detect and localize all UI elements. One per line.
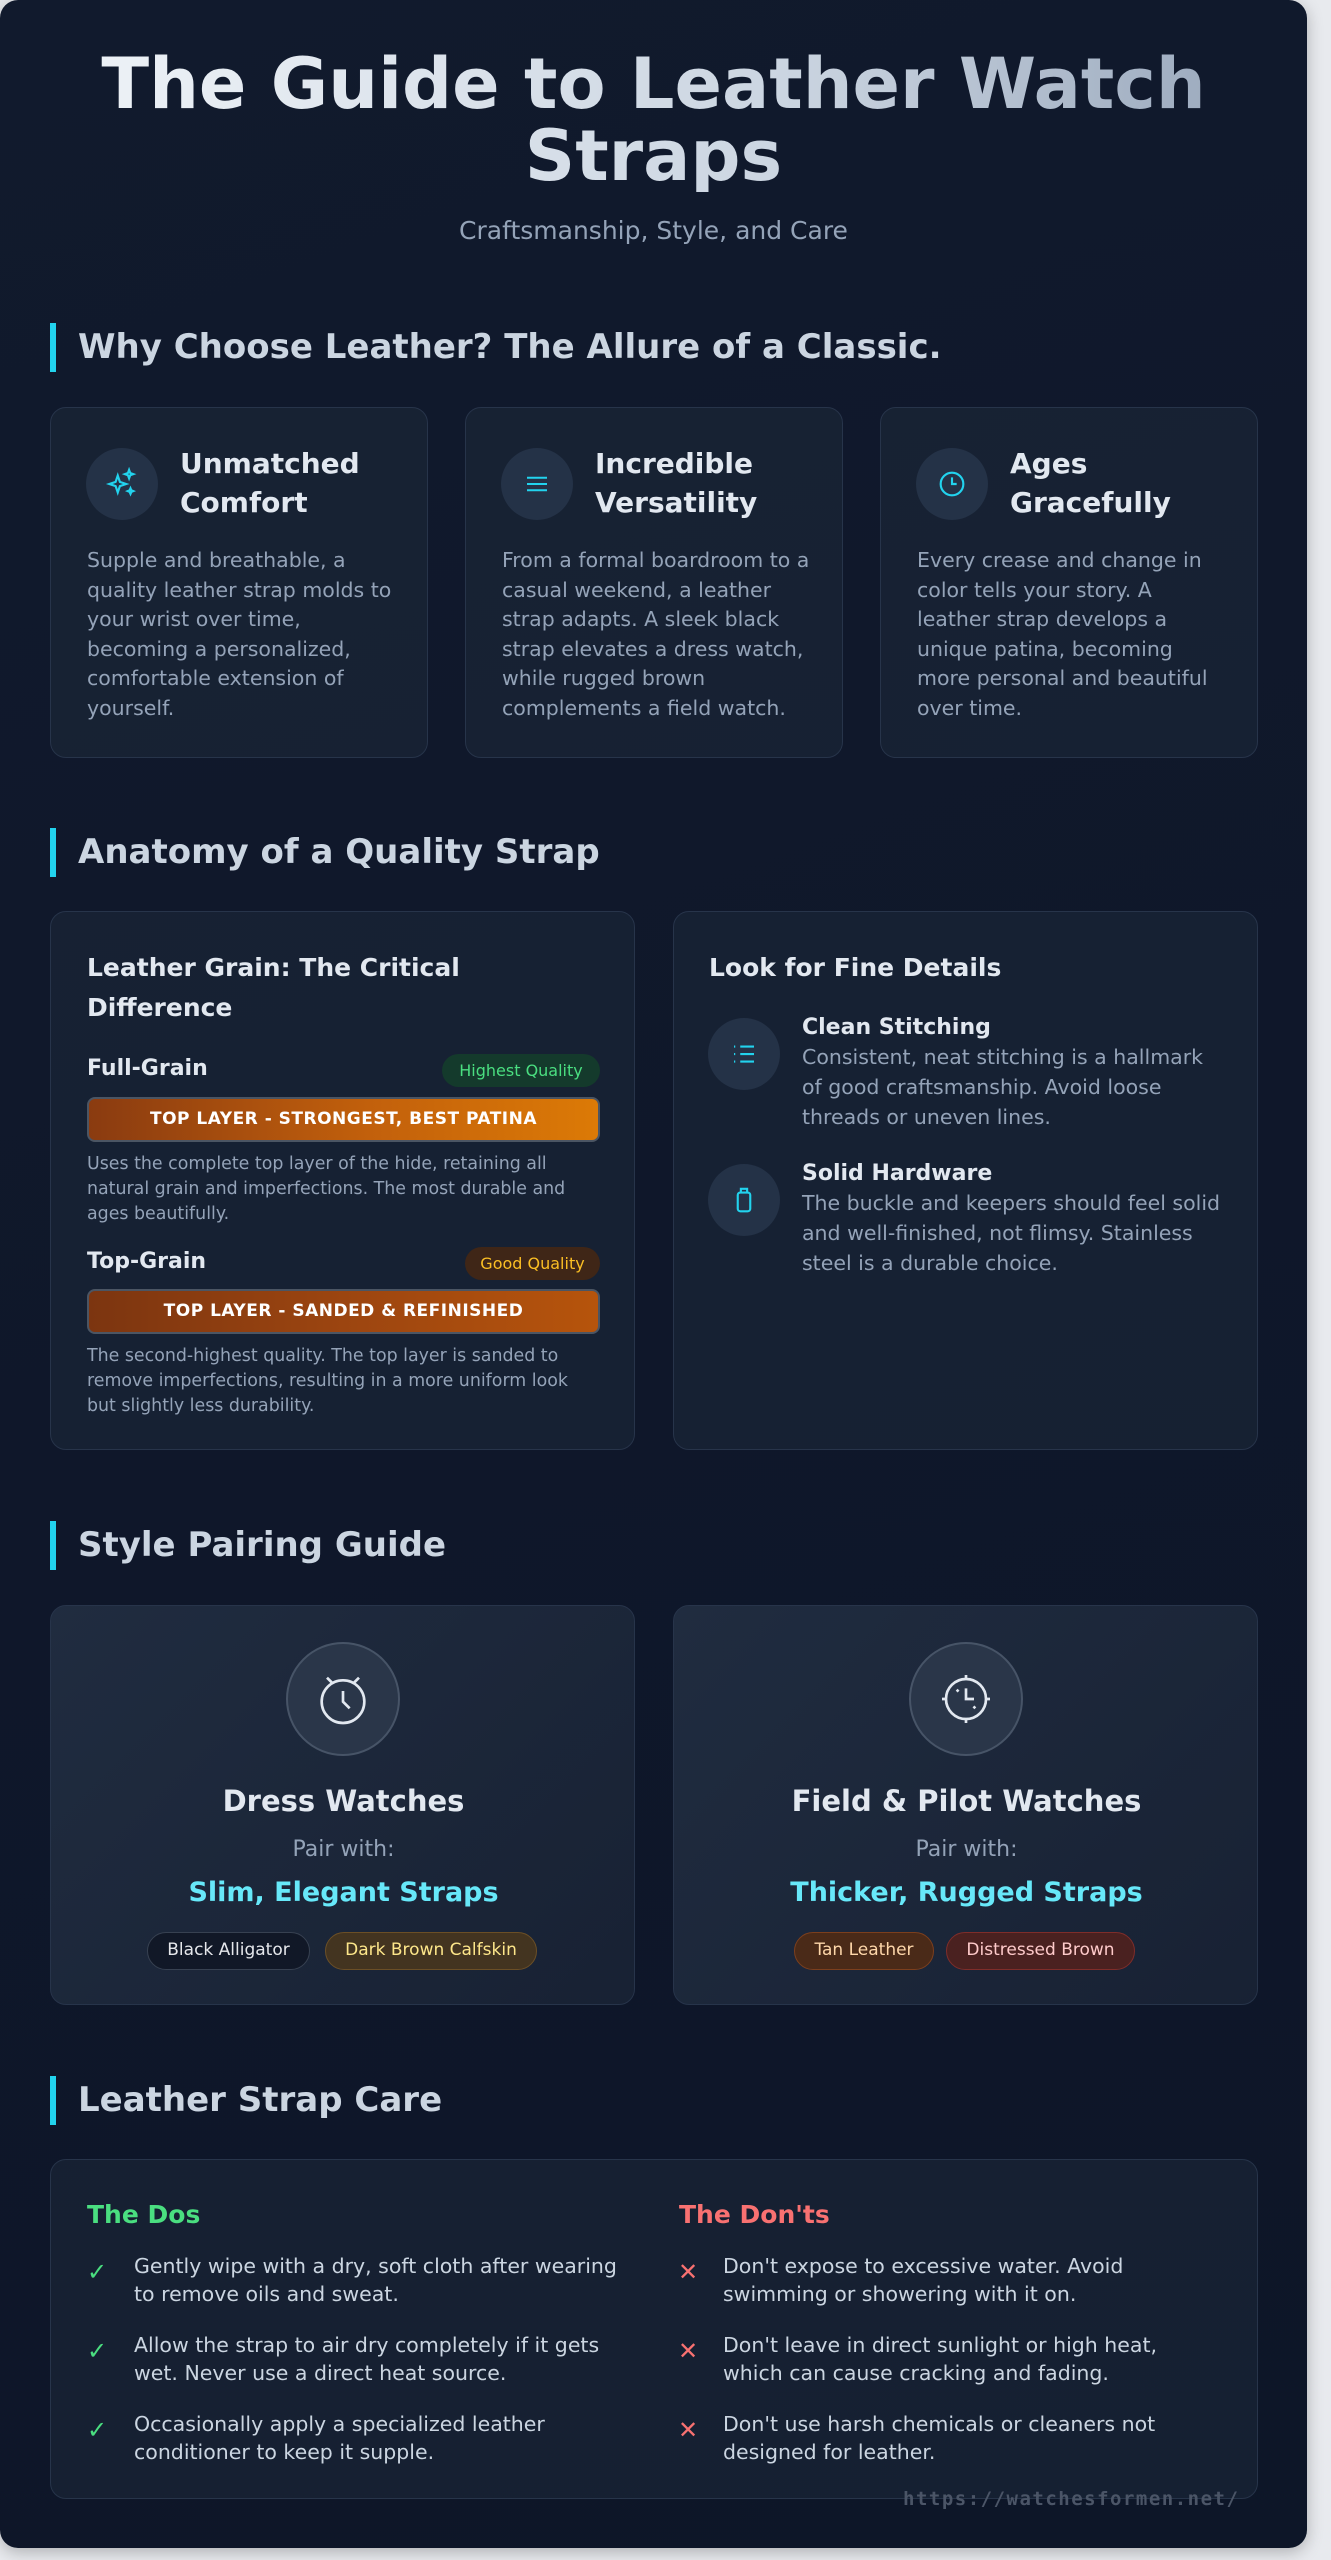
top-grain text: The second-highest quality. The top layer is sanded to remove imperfections, resulting in a more uniform look but slightly less durability.: [87, 1346, 568, 1416]
badge: highest: [442, 1054, 600, 1087]
badge: good: [465, 1247, 600, 1280]
dos heading: The Dos: [87, 2200, 200, 2229]
donts list: Don't expose to excessive water. Avoid swimming or showering with it on.: [723, 2254, 1123, 2306]
panel: dress watches: [50, 1605, 635, 2005]
card: comfort: [50, 407, 428, 758]
item: stitching: Consistent, neat stitching is a hallmark of good craftsmanship. Avoid loose threads or uneven lines.: [802, 1045, 1203, 1129]
section heading: style pairing: Style Pairing Guide: [78, 1525, 446, 1565]
card title: Ages: [1010, 447, 1087, 480]
recommendation: Slim, Elegant Straps: [188, 1877, 499, 1908]
bar: top-grain: TOP LAYER - SANDED & REFINISHED: [164, 1301, 523, 1321]
dos list: Allow the strap to air dry completely if it gets wet. Never use a direct heat source.: [134, 2333, 599, 2385]
tag: black alligator: Black Alligator: [167, 1940, 290, 1960]
badge: good: Good Quality: [480, 1254, 585, 1273]
dos list: Gently wipe with a dry, soft cloth after wearing to remove oils and sweat.: [134, 2254, 617, 2306]
card title: Versatility: [595, 486, 757, 519]
panel: leather grain: [50, 911, 635, 1450]
icon: clock: [916, 448, 988, 520]
panel: field watches: [673, 1605, 1258, 2005]
donts heading: The Don'ts: [679, 2200, 830, 2229]
card text: Every crease and change in color tells your story. A leather strap develops a unique patina, becoming more personal and beautiful over time.: [917, 548, 1208, 720]
donts list: [678, 2254, 1157, 2464]
icon: pilot watch: [909, 1642, 1023, 1756]
section heading: care: Leather Strap Care: [78, 2080, 442, 2120]
donts list: Don't leave in direct sunlight or high heat, which can cause cracking and fading.: [723, 2333, 1157, 2385]
tag: tan: Tan Leather: [814, 1940, 914, 1960]
top-grain label: Top-Grain: [87, 1249, 206, 1274]
heading: [87, 953, 460, 1022]
full-grain text: Uses the complete top layer of the hide, retaining all natural grain and imperfections. The most durable and ages beautifully.: [87, 1154, 565, 1224]
watermark: https://watchesformen.net/: [903, 2488, 1239, 2510]
icon: sparkles: [86, 448, 158, 520]
tag: distressed: [946, 1932, 1135, 1970]
dos list: [87, 2254, 617, 2464]
recommendation: Thicker, Rugged Straps: [790, 1877, 1143, 1908]
donts list: ✕: [678, 2337, 698, 2365]
icon: buckle: [708, 1164, 780, 1236]
card title: [1010, 447, 1171, 519]
tag: dark brown: [325, 1932, 537, 1970]
donts list: Don't use harsh chemicals or cleaners not designed for leather.: [723, 2412, 1155, 2464]
item: hardware: The buckle and keepers should feel solid and well-finished, not flimsy. Stainless steel is a durable choice.: [802, 1191, 1220, 1275]
bar: top-grain: [87, 1289, 600, 1334]
card: ages: [880, 407, 1258, 758]
icon: dress watch: [286, 1642, 400, 1756]
card title: [180, 447, 360, 519]
heading: Difference: [87, 993, 232, 1022]
icon: list: [708, 1018, 780, 1090]
card title: Unmatched: [180, 447, 360, 480]
dos list: ✓: [87, 2337, 107, 2365]
title: The Guide to Leather Watch: [101, 43, 1206, 125]
tag: black alligator: [147, 1932, 310, 1970]
donts list: ✕: [678, 2258, 698, 2286]
card text: Supple and breathable, a quality leather strap molds to your wrist over time, becoming a personalized, comfortable extension of yourself.: [87, 548, 391, 720]
dos list: ✓: [87, 2416, 107, 2444]
tag: dark brown: Dark Brown Calfskin: [345, 1940, 517, 1960]
icon: lines: [501, 448, 573, 520]
full-grain label: Full-Grain: [87, 1056, 208, 1081]
subtitle: Craftsmanship, Style, and Care: [459, 216, 848, 245]
card: versatility: [465, 407, 843, 758]
card title: Field & Pilot Watches: [792, 1784, 1141, 1818]
badge: highest: Highest Quality: [459, 1061, 583, 1080]
section heading: why leather: Why Choose Leather? The Allure of a Classic.: [78, 327, 942, 367]
item: hardware: Solid Hardware: [802, 1161, 992, 1186]
pair label: Pair with:: [916, 1837, 1018, 1862]
card title: [595, 447, 757, 519]
tag: distressed: Distressed Brown: [966, 1940, 1115, 1960]
heading: Look for Fine Details: [709, 953, 1001, 982]
dos list: Occasionally apply a specialized leather conditioner to keep it supple.: [134, 2412, 545, 2464]
card text: From a formal boardroom to a casual weekend, a leather strap adapts. A sleek black strap elevates a dress watch, while rugged brown complements a field watch.: [502, 548, 809, 720]
card title: Gracefully: [1010, 486, 1171, 519]
panel: fine details: [673, 911, 1258, 1450]
title: [0, 48, 1307, 192]
panel: care: [50, 2159, 1258, 2499]
card title: Comfort: [180, 486, 308, 519]
item: stitching: Clean Stitching: [802, 1015, 991, 1040]
pair label: Pair with:: [292, 1837, 394, 1862]
bar: full-grain: [87, 1097, 600, 1142]
section heading: anatomy: Anatomy of a Quality Strap: [78, 832, 600, 872]
title: Straps: [525, 115, 782, 197]
bar: full-grain: TOP LAYER - STRONGEST, BEST PATINA: [150, 1109, 537, 1129]
card title: Dress Watches: [223, 1784, 464, 1818]
tag: tan: [794, 1932, 934, 1970]
card title: Incredible: [595, 447, 753, 480]
dos list: ✓: [87, 2258, 107, 2286]
heading: Leather Grain: The Critical: [87, 953, 460, 982]
donts list: ✕: [678, 2416, 698, 2444]
